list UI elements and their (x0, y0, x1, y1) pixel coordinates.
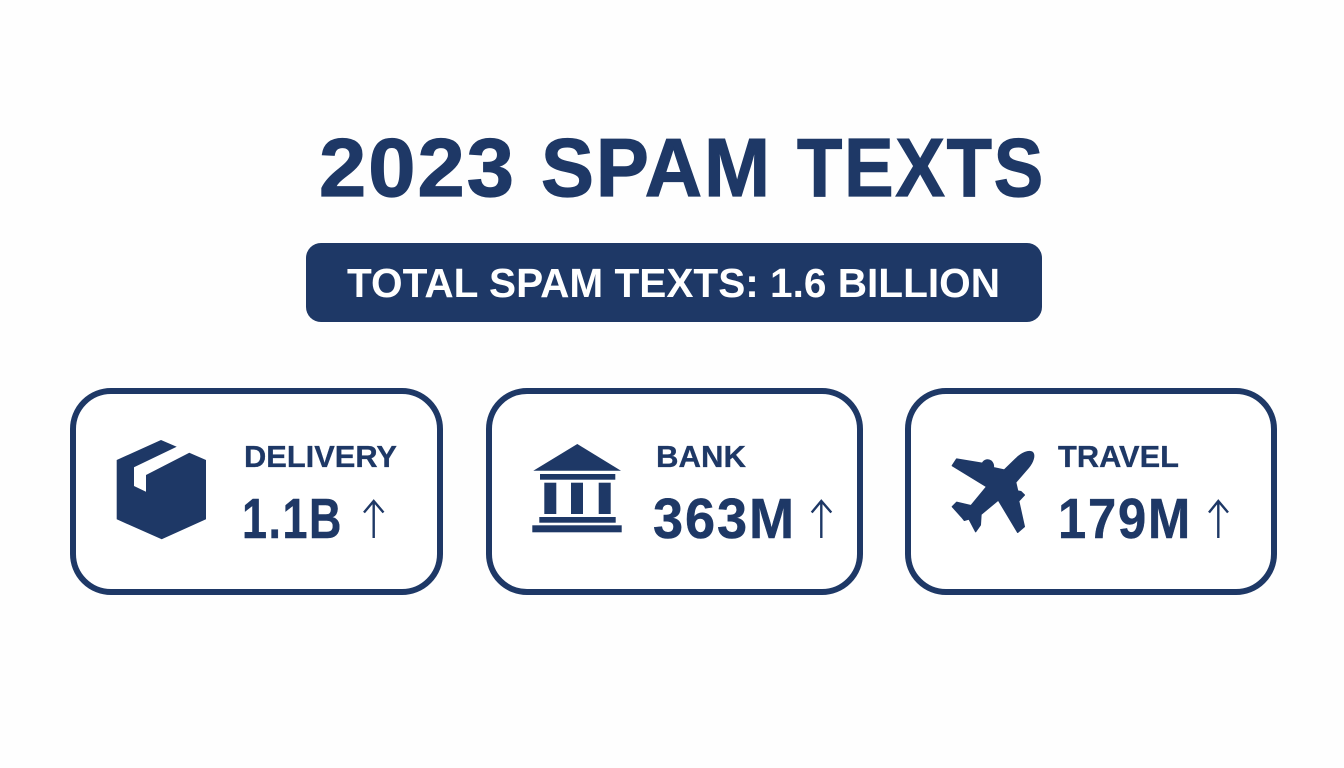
title: TEXTS (797, 121, 1045, 214)
bank label: BANK (656, 439, 747, 474)
delivery value: 1.1B (242, 487, 343, 551)
title: SPAM (541, 121, 772, 214)
travel label: TRAVEL (1058, 439, 1179, 474)
title: 2023 (319, 121, 516, 214)
travel value: 179M (1058, 487, 1192, 551)
arrow: bank up (812, 501, 831, 538)
title (319, 121, 1045, 214)
panel: delivery (73, 391, 440, 592)
arrow: travel up (1209, 501, 1228, 538)
arrow: delivery up (364, 501, 384, 538)
icon: airplane (952, 452, 1034, 532)
panel: travel (908, 391, 1274, 592)
banner text: TOTAL SPAM TEXTS: 1.6 BILLION (347, 260, 1000, 306)
banner: total spam texts (306, 243, 1042, 322)
icon: bank building (532, 444, 622, 532)
icon: package box (117, 440, 206, 539)
panel: bank (489, 391, 860, 592)
bank value: 363M (653, 487, 796, 551)
delivery label: DELIVERY (244, 439, 397, 474)
